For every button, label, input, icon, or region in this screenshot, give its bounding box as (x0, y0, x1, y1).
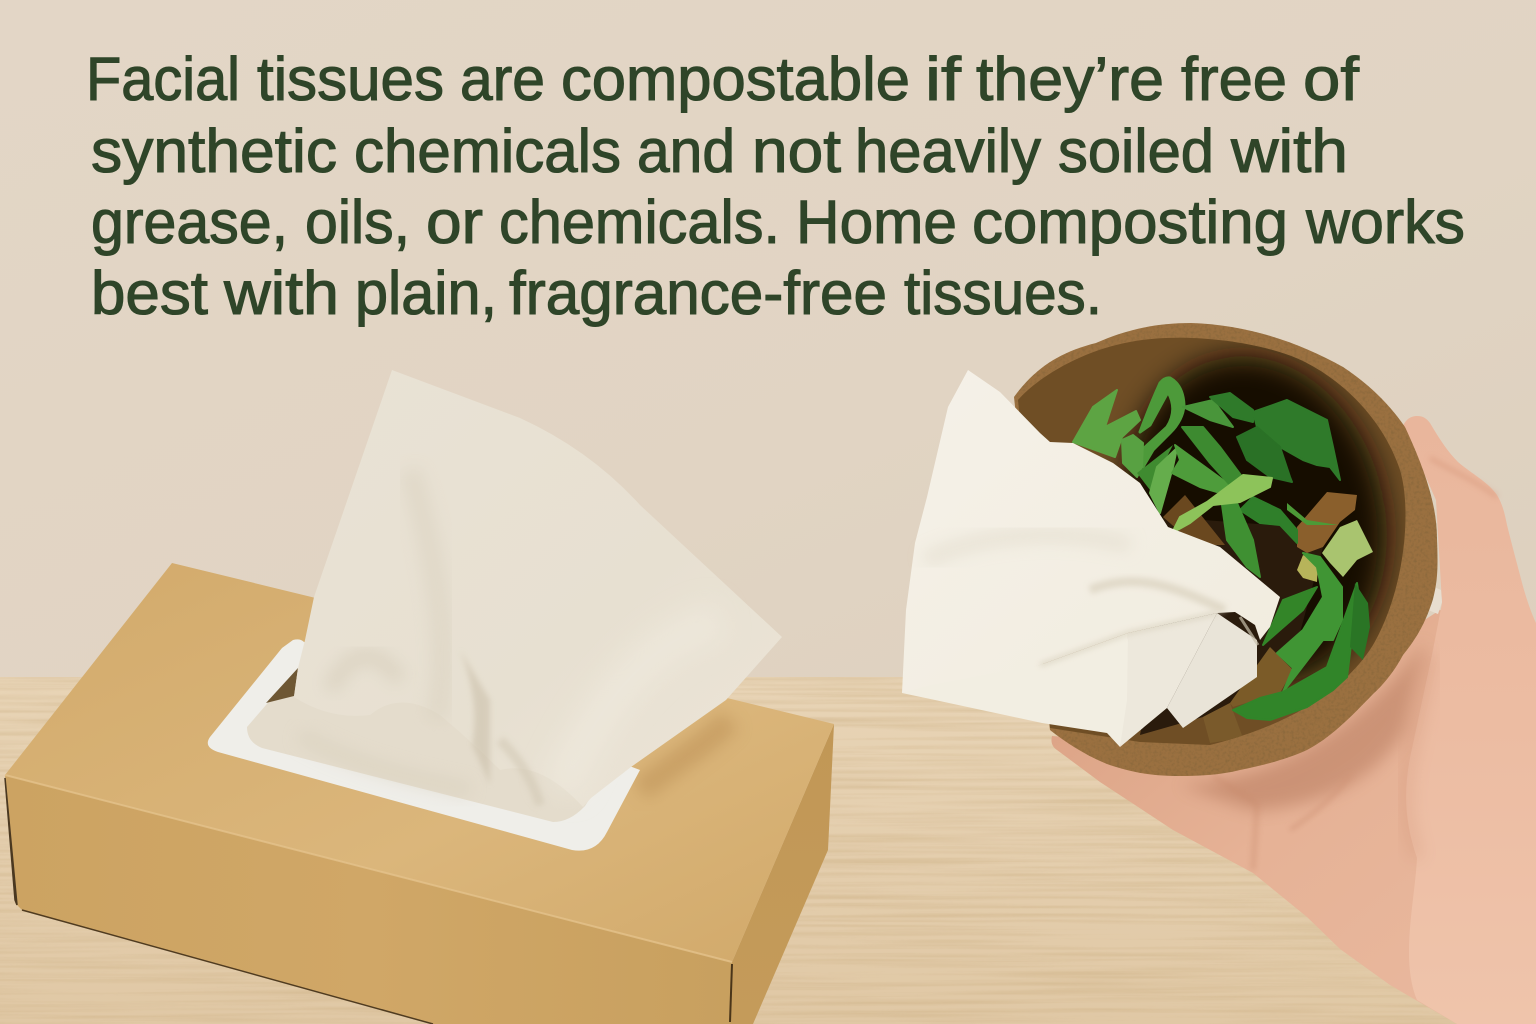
heading text: and (637, 117, 735, 185)
bowl rim (1014, 323, 1438, 776)
heading text: plain, (355, 259, 497, 327)
heading text: tissues. (904, 259, 1102, 327)
heading text: chemicals. (499, 188, 780, 256)
thumb and fingers (1403, 416, 1536, 1024)
heading text: composting (972, 188, 1288, 256)
box right side (730, 724, 834, 1024)
heading text: oils, (305, 188, 410, 256)
heading text: heavily (855, 117, 1041, 185)
leaf: upper left pointed (1073, 390, 1140, 457)
heading text: chemicals (354, 117, 621, 185)
heading text (86, 45, 1465, 327)
wall background (0, 0, 1536, 678)
compost bowl (1010, 323, 1438, 776)
box top face (5, 563, 834, 962)
heading text: free (1181, 45, 1287, 113)
heading text: soiled (1058, 117, 1214, 185)
box front face (5, 775, 732, 1024)
heading text: fragrance-free (509, 259, 887, 327)
leaf: curved stem (1140, 378, 1184, 467)
finger web crease (1213, 776, 1257, 870)
heading text: Facial (86, 45, 240, 113)
heading text: with (223, 259, 339, 327)
heading text: compostable (561, 45, 910, 113)
heading text: they’re (976, 45, 1164, 113)
crumpled tissue on bowl (902, 370, 1280, 747)
interior dark centre (1109, 340, 1405, 692)
heading text: or (426, 188, 483, 256)
lower fold (902, 633, 1128, 747)
leaf: bright central (1172, 475, 1272, 533)
heading text: if (925, 45, 962, 113)
tissue shadow on box (640, 720, 730, 790)
heading text: tissues (257, 45, 444, 113)
facial tissue from box (247, 370, 782, 822)
back panels (1167, 613, 1257, 728)
compost scraps (1140, 517, 1323, 735)
wooden table (0, 677, 1536, 1024)
leaf: top middle (1183, 400, 1233, 427)
knuckle crease (1430, 458, 1497, 497)
heading text: with (1230, 117, 1348, 185)
leaf: mid lower (1240, 497, 1297, 543)
heading text: grease, (91, 188, 288, 256)
heading text: best (91, 259, 208, 327)
leaf: centre blades (1172, 445, 1230, 492)
heading text: of (1303, 45, 1360, 113)
main sheet (902, 370, 1280, 693)
tissue shading (1040, 613, 1217, 665)
hand holding bowl (1051, 416, 1536, 1024)
wall gap (1428, 586, 1442, 614)
dispenser opening (208, 639, 640, 851)
heading text: Home (796, 188, 957, 256)
tissue folds (410, 470, 442, 720)
heading text: works (1305, 188, 1465, 256)
heading text: synthetic (91, 117, 337, 185)
leaf: upper right large (1253, 400, 1340, 480)
heading text: not (752, 117, 841, 185)
leaves (1073, 378, 1370, 720)
leaf: lower right large (1263, 587, 1317, 645)
heading text: are (460, 45, 545, 113)
tissue box (5, 563, 834, 1024)
box left edge sliver (5, 778, 17, 905)
shadow beneath bowl (1180, 640, 1425, 810)
bowl interior (1010, 330, 1420, 750)
palm and lower hand (1051, 610, 1536, 1024)
